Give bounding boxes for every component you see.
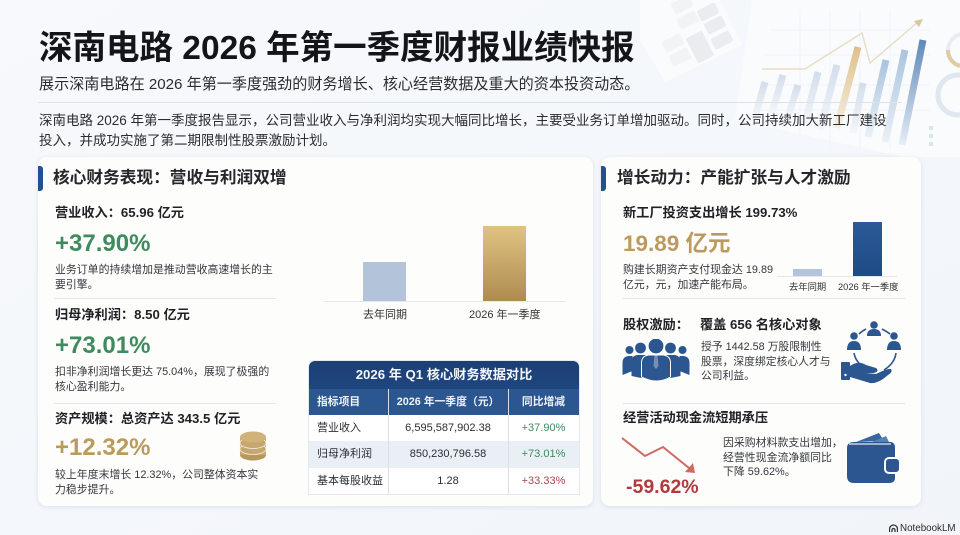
icon: notebooklm logo [889, 524, 898, 532]
panel: growth drivers [601, 157, 921, 506]
table rows: 营业收入 [317, 422, 361, 434]
bar: Q1 2026 [483, 226, 526, 301]
table rows: 基本每股收益 [317, 475, 383, 487]
text: cash flow explanation: 下降 59.62%。 [723, 466, 796, 478]
metric: revenue [55, 205, 273, 290]
table header: 同比增减 [522, 396, 565, 408]
text: cash flow explanation: 经营性现金流净额同比 [723, 452, 832, 464]
summary paragraph [39, 113, 887, 148]
summary paragraph: 深南电路 2026 年第一季度报告显示，公司营业收入与净利润均实现大幅同比增长，主要受业务订单增加驱动。同时，公司持续加大新工厂建设 [39, 113, 887, 128]
label: capex last year: 去年同期 [789, 282, 826, 292]
subtitle: 展示深南电路在 2026 年第一季度强劲的财务增长、核心经营数据及重大的资本投资动态。 [39, 76, 639, 93]
text: cash flow explanation [723, 436, 843, 478]
bar chart: capex [777, 222, 898, 292]
metric: equity incentive: 股票，深度绑定核心人才与 [701, 356, 831, 368]
metric: assets: 资产规模：总资产达 343.5 亿元 [55, 411, 240, 426]
icon: wallet [847, 433, 899, 483]
data table [309, 361, 579, 494]
text: cash flow explanation: 因采购材料款支出增加， [723, 437, 843, 449]
metric: revenue: +37.90% [55, 230, 150, 257]
metric: net profit: 归母净利润：8.50 亿元 [55, 307, 190, 322]
heading: core financial: 核心财务表现：营收与利润双增 [53, 168, 287, 187]
metric: revenue: 营业收入：65.96 亿元 [55, 205, 184, 220]
NotebookLM watermark [889, 523, 956, 534]
table rows: +33.33% [522, 475, 565, 487]
accent bar right [601, 166, 606, 191]
metric: assets: 较上年度末增长 12.32%，公司整体资本实 [55, 469, 258, 481]
metric: net profit: 核心盈利能力。 [55, 380, 131, 392]
icon: group of people [622, 339, 690, 380]
metric: equity incentive: 覆盖 656 名核心对象 [700, 317, 822, 332]
table rows: 1.28 [437, 475, 459, 487]
table header [309, 389, 579, 415]
table rows: 850,230,796.58 [410, 448, 486, 460]
label: Q1 2026: 2026 年一季度 [469, 309, 541, 321]
metric: new plant investment: 新工厂投资支出增长 199.73% [623, 205, 797, 220]
table rows: +73.01% [522, 448, 565, 460]
metric: equity incentive [623, 317, 831, 382]
table title: 2026 年 Q1 核心财务数据对比 [356, 367, 532, 382]
table title [309, 361, 579, 389]
title: 深南电路 2026 年第一季度财报业绩快报 [39, 30, 635, 67]
table header: 指标项目 [317, 396, 360, 408]
metric: equity incentive: 授予 1442.58 万股限制性 [701, 341, 822, 353]
accent bar left [38, 166, 43, 191]
bar: capex Q1 2026 [853, 222, 882, 276]
metric: revenue: 要引擎。 [55, 278, 99, 290]
icon: circle of people in hand [841, 321, 901, 384]
icon: coin stack [240, 432, 266, 460]
metric: operating cash flow: 经营活动现金流短期承压 [623, 410, 768, 425]
stat: cash flow decline: -59.62% [626, 476, 699, 498]
metric: equity incentive: 股权激励： [623, 317, 689, 332]
metric: net profit: +73.01% [55, 332, 150, 359]
bar: last year [363, 262, 406, 301]
metric: net profit [55, 307, 269, 392]
metric: new plant investment: 亿元，元，加速产能布局。 [623, 278, 754, 290]
metric: new plant investment: 19.89 亿元 [623, 231, 731, 256]
table rows: +37.90% [522, 422, 565, 434]
metric: revenue: 业务订单的持续增加是推动营收高速增长的主 [55, 264, 273, 276]
metric: new plant investment: 购建长期资产支付现金达 19.89 [623, 264, 773, 276]
label: capex Q1 2026: 2026 年一季度 [838, 282, 898, 292]
chart: falling line arrow [622, 437, 695, 473]
summary paragraph: 投入，并成功实施了第二期限制性股票激励计划。 [39, 133, 336, 148]
table header: 2026 年一季度（元） [397, 396, 499, 408]
table rows [309, 422, 579, 487]
metric: assets: 力稳步提升。 [55, 484, 120, 496]
metric: assets [55, 411, 258, 496]
text: notebooklm: NotebookLM [900, 523, 956, 534]
metric: net profit: 扣非净利润增长更达 75.04%，展现了极强的 [55, 366, 269, 378]
bar chart: revenue comparison [324, 226, 565, 321]
table rows: 6,595,587,902.38 [405, 422, 491, 434]
metric: assets: +12.32% [55, 434, 150, 461]
table rows: 归母净利润 [317, 448, 372, 460]
panel: core financial performance [38, 157, 593, 506]
label: last year: 去年同期 [363, 309, 407, 321]
bar: capex last year [793, 269, 822, 276]
metric: equity incentive: 公司利益。 [701, 370, 755, 382]
heading: growth drivers: 增长动力：产能扩张与人才激励 [617, 168, 851, 187]
metric: new plant investment [623, 205, 797, 290]
